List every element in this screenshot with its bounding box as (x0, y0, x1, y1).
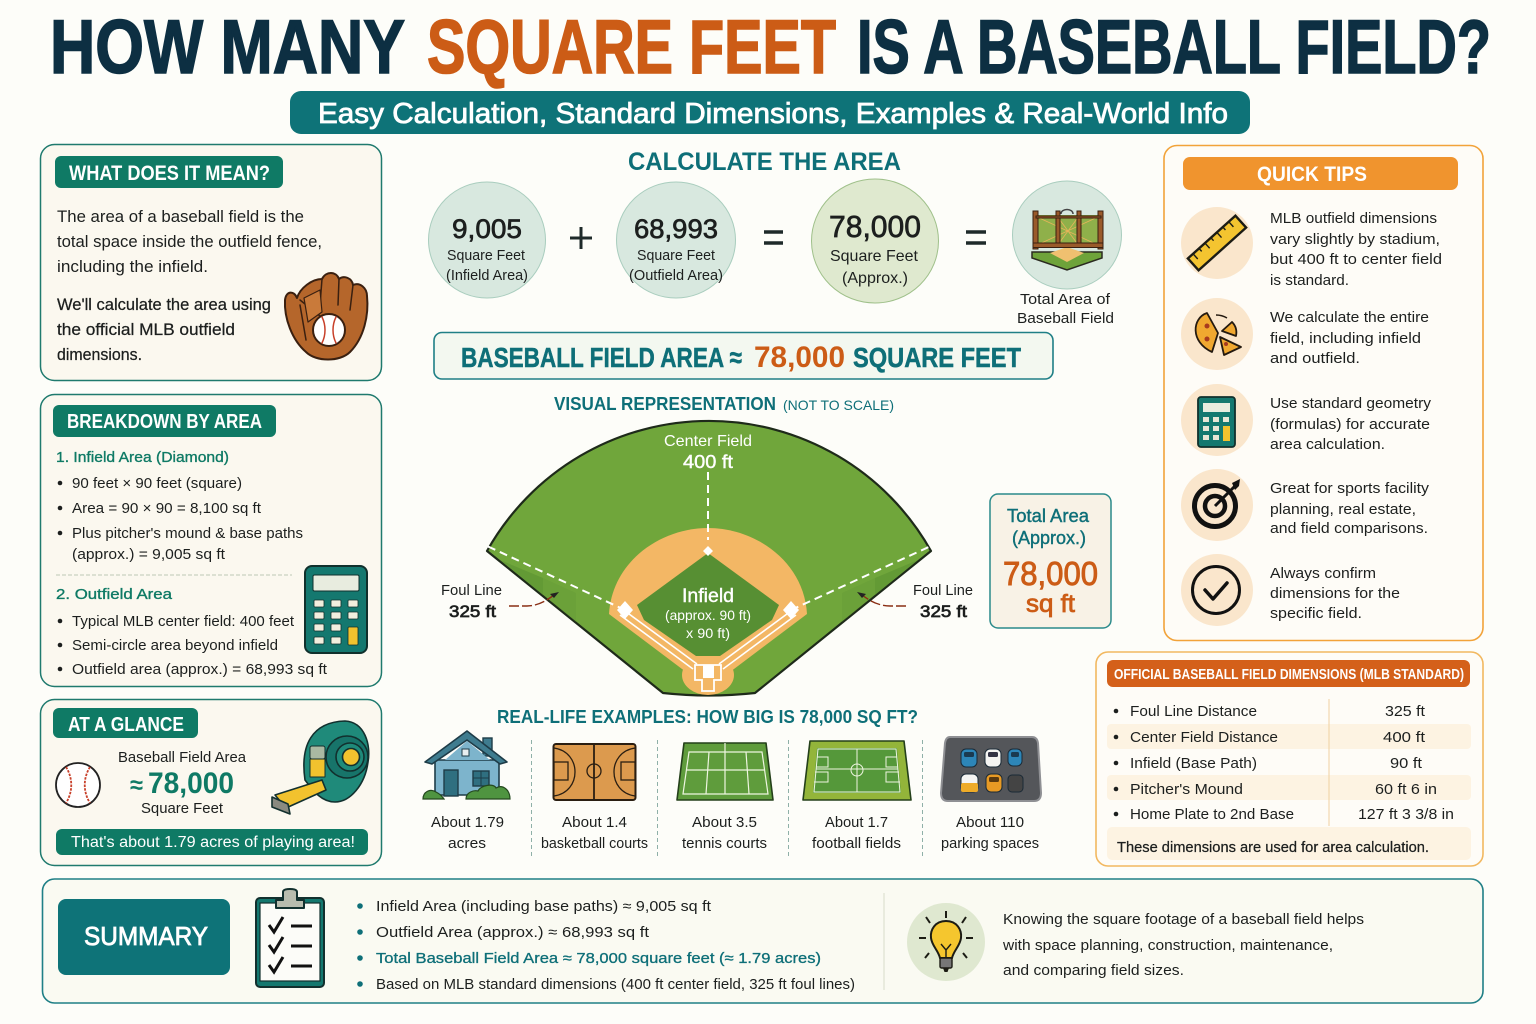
example: house (423, 731, 510, 799)
label: football fields: football fields (812, 835, 901, 852)
text block: outfield area (56, 586, 328, 678)
text block: why it matters: Knowing the square footage of a baseball field helps (1003, 911, 1364, 928)
table: dimensions: 90 ft (1390, 755, 1423, 772)
example: basketball court (554, 744, 636, 800)
banner: result: 78,000 (754, 341, 845, 374)
equation circle: infield (428, 182, 546, 298)
infield grass diamond (637, 553, 779, 656)
heading: calculate the area: CALCULATE THE AREA (628, 148, 901, 176)
text block: outfield area: Semi-circle area beyond infield (72, 637, 278, 654)
equation circle: infield: (Infield Area) (446, 267, 528, 284)
diagram: baseball field (487, 421, 931, 696)
heading: at a glance (53, 708, 198, 738)
text block: infield area: Area = 90 × 90 = 8,100 sq ft (72, 500, 262, 517)
icon: baseball glove (285, 273, 367, 360)
table: dimensions: Center Field Distance (1130, 729, 1278, 746)
label: foul line right (857, 582, 973, 621)
heading: quick tips: QUICK TIPS (1257, 163, 1367, 186)
text block: tip 4: Great for sports facility (1270, 480, 1430, 497)
bases (617, 546, 799, 619)
table: dimensions: Pitcher's Mound (1130, 781, 1243, 798)
text block: area figure: ≈ (130, 772, 143, 799)
label: basketball courts (541, 814, 648, 852)
text block: summary list: Infield Area (including base paths) ≈ 9,005 sq ft (376, 898, 712, 915)
text block: why it matters (1002, 911, 1364, 979)
base paths (620, 611, 796, 669)
icon: ruler (1181, 207, 1253, 279)
text block: tip 1: but 400 ft to center field (1270, 251, 1442, 268)
text block: area figure: Square Feet (141, 800, 224, 817)
icon: target (1181, 469, 1253, 541)
label: foul line left: 325 ft (449, 602, 496, 621)
icon: light bulb (907, 903, 985, 981)
panel: quick tips (1164, 146, 1483, 640)
label: total area of baseball field: Baseball Field (1017, 310, 1114, 327)
text block: outfield area: Typical MLB center field: 400 feet (72, 613, 295, 630)
icon: calculator (1181, 384, 1253, 456)
label: parking spaces: About 110 (956, 814, 1024, 831)
text block: tip 1 (1270, 210, 1442, 289)
heading: breakdown by area (53, 405, 276, 437)
label: acres (431, 814, 504, 852)
icon: field in circle (1012, 181, 1122, 289)
text block: tip 2: field, including infield (1270, 330, 1421, 347)
callout: acres (56, 829, 368, 855)
table: dimensions: 60 ft 6 in (1375, 781, 1437, 798)
icon: clipboard (256, 889, 324, 987)
heading: what does it mean (55, 156, 283, 188)
label: foul line left (441, 582, 559, 621)
field labels: (approx. 90 ft) (665, 607, 751, 623)
heading: summary: SUMMARY (84, 921, 208, 951)
text block: tip 3: Use standard geometry (1270, 395, 1432, 412)
dashed lines (487, 472, 931, 610)
title: HOW MANY (50, 5, 405, 90)
heading: real-life examples: REAL-LIFE EXAMPLES: HOW BIG IS 78,000 SQ FT? (497, 707, 918, 727)
text block: tip 5: dimensions for the (1270, 585, 1400, 602)
table: dimensions: Foul Line Distance (1130, 703, 1257, 720)
heading: visual representation: (NOT TO SCALE) (783, 397, 894, 413)
example: parking lot (941, 737, 1041, 801)
label: tennis courts (682, 814, 767, 852)
label: total area of baseball field (1017, 291, 1114, 327)
text block: method: the official MLB outfield (57, 321, 235, 339)
subtitle banner: Easy Calculation, Standard Dimensions, Examples & Real-World Info (318, 98, 1228, 130)
text block: definition: including the infield. (57, 258, 208, 276)
note: dimensions (1107, 827, 1471, 860)
text block: outfield area: Outfield area (approx.) = 68,993 sq ft (72, 661, 328, 678)
field labels (664, 433, 752, 641)
heading: summary (58, 899, 230, 975)
label: tennis courts: About 3.5 (692, 814, 757, 831)
text block: tip 4: planning, real estate, (1270, 501, 1416, 518)
banner: result: SQUARE FEET (853, 342, 1021, 373)
text block: tip 3: area calculation. (1270, 436, 1385, 453)
equation circle: total: Square Feet (830, 248, 919, 265)
text block: definition: The area of a baseball field is the (57, 208, 304, 226)
icon: check mark (1181, 554, 1253, 626)
field labels: Center Field (664, 433, 752, 450)
text block: tip 4 (1270, 480, 1430, 537)
table: dimensions: 127 ft 3 3/8 in (1358, 806, 1454, 823)
plus sign (570, 227, 592, 249)
equation circle: total: (Approx.) (842, 270, 908, 287)
heading: at a glance: AT A GLANCE (68, 714, 184, 736)
text block: tip 1: MLB outfield dimensions (1270, 210, 1437, 227)
panel: at a glance (40, 700, 382, 866)
label: acres: acres (448, 835, 486, 852)
panel: official dimensions (1096, 652, 1483, 866)
table: dimensions: Infield (Base Path) (1130, 755, 1257, 772)
table: dimensions (1107, 699, 1471, 826)
panel: summary (42, 879, 1483, 1003)
text block: infield area (56, 449, 303, 563)
equals sign (764, 232, 783, 243)
text block: tip 3 (1270, 395, 1432, 453)
callout: total area (990, 494, 1111, 628)
subtitle banner (290, 91, 1250, 134)
equation circle: outfield: 68,993 (634, 214, 718, 244)
text block: tip 2: and outfield. (1270, 350, 1360, 367)
equation circle: infield: Square Feet (447, 247, 526, 264)
label: tennis courts: tennis courts (682, 835, 767, 852)
text block: tip 2: We calculate the entire (1270, 309, 1429, 326)
icon: pizza (1181, 298, 1253, 370)
label: acres: About 1.79 (431, 814, 504, 831)
text block: summary list: Total Baseball Field Area ≈ 78,000 square feet (≈ 1.79 acres) (376, 950, 821, 967)
home plate circle (682, 655, 734, 695)
equals sign (966, 232, 986, 243)
example: tennis court (677, 743, 773, 800)
label: total area of baseball field: Total Area of (1020, 291, 1111, 308)
callout: acres: That's about 1.79 acres of playing area! (71, 834, 355, 851)
heading: official dimensions (1107, 660, 1470, 687)
text block: method: dimensions. (57, 346, 142, 364)
icon: calculator (305, 566, 367, 653)
text block: infield area: Plus pitcher's mound & base paths (72, 525, 303, 542)
panel: breakdown by area (40, 394, 382, 686)
equation circle: total (812, 179, 938, 303)
text block: method: We'll calculate the area using (57, 296, 271, 314)
label: football fields (812, 814, 901, 852)
label: basketball courts: basketball courts (541, 835, 648, 852)
label: parking spaces: parking spaces (941, 835, 1039, 852)
callout: total area: 78,000 (1003, 555, 1098, 592)
equation circle: total: 78,000 (829, 209, 921, 244)
banner: result (434, 332, 1053, 379)
text block: tip 5: specific field. (1270, 605, 1362, 622)
text block: summary list: Based on MLB standard dimensions (400 ft center field, 325 ft foul lines) (376, 976, 855, 993)
note: dimensions: These dimensions are used for area calculation. (1117, 839, 1429, 856)
callout: total area: sq ft (1026, 590, 1075, 618)
label: basketball courts: About 1.4 (562, 814, 627, 831)
heading: official dimensions: OFFICIAL BASEBALL FIELD DIMENSIONS (MLB STANDARD) (1114, 666, 1464, 683)
text block: area figure: 78,000 (148, 767, 234, 800)
field labels: Infield (682, 586, 734, 607)
text block: tip 5 (1270, 565, 1400, 622)
text block: definition: total space inside the outfield fence, (57, 233, 322, 251)
label: football fields: About 1.7 (825, 814, 888, 831)
equation circle: outfield: (Outfield Area) (629, 267, 723, 284)
title (50, 5, 1491, 90)
label: foul line right: 325 ft (920, 602, 967, 621)
equation circle: outfield: Square Feet (637, 247, 716, 264)
text block: tip 3: (formulas) for accurate (1270, 416, 1430, 433)
table: dimensions: 400 ft (1383, 729, 1426, 746)
title: SQUARE FEET (427, 5, 836, 90)
banner: result: BASEBALL FIELD AREA ≈ (461, 342, 742, 373)
icon: baseball (56, 763, 100, 807)
text block: infield area: 1. Infield Area (Diamond) (56, 449, 229, 466)
text block: tip 2 (1270, 309, 1429, 367)
text block: why it matters: with space planning, construction, maintenance, (1002, 937, 1333, 954)
text block: tip 4: and field comparisons. (1270, 520, 1428, 537)
panel: what does it mean (40, 144, 382, 380)
heading: visual representation: VISUAL REPRESENTATION (554, 394, 776, 414)
icon: tape measure (272, 721, 369, 814)
label: foul line right: Foul Line (913, 582, 973, 599)
infield dirt (609, 528, 807, 672)
text block: why it matters: and comparing field sizes. (1003, 962, 1184, 979)
heading: quick tips (1183, 157, 1458, 190)
label: parking spaces (941, 814, 1039, 852)
text block: outfield area: 2. Outfield Area (56, 586, 173, 603)
text block: method (57, 296, 271, 364)
field labels: 400 ft (683, 452, 733, 472)
equation circle: infield: 9,005 (452, 214, 522, 244)
label: foul line left: Foul Line (441, 582, 502, 599)
example: football field (803, 741, 911, 800)
text block: infield area: 90 feet × 90 feet (square) (72, 475, 242, 492)
text block: area figure (118, 749, 247, 817)
heading: what does it mean: WHAT DOES IT MEAN? (69, 162, 270, 185)
text block: tip 5: Always confirm (1270, 565, 1376, 582)
heading: breakdown by area: BREAKDOWN BY AREA (67, 411, 262, 433)
table: dimensions: 325 ft (1385, 703, 1426, 720)
text block: tip 1: vary slightly by stadium, (1270, 231, 1440, 248)
text block: tip 1: is standard. (1270, 272, 1349, 289)
field labels: x 90 ft) (686, 625, 730, 641)
text block: summary list (357, 898, 855, 993)
text block: area figure: Baseball Field Area (118, 749, 247, 766)
text block: infield area: (approx.) = 9,005 sq ft (72, 546, 226, 563)
text block: summary list: Outfield Area (approx.) ≈ 68,993 sq ft (376, 924, 650, 941)
outfield grass (487, 421, 931, 696)
equation circle: outfield (616, 182, 736, 298)
table: dimensions: Home Plate to 2nd Base (1130, 806, 1294, 823)
text block: definition (57, 208, 322, 276)
callout: total area: (Approx.) (1012, 528, 1086, 548)
callout: total area: Total Area (1007, 506, 1090, 526)
heading: visual representation (554, 394, 894, 414)
